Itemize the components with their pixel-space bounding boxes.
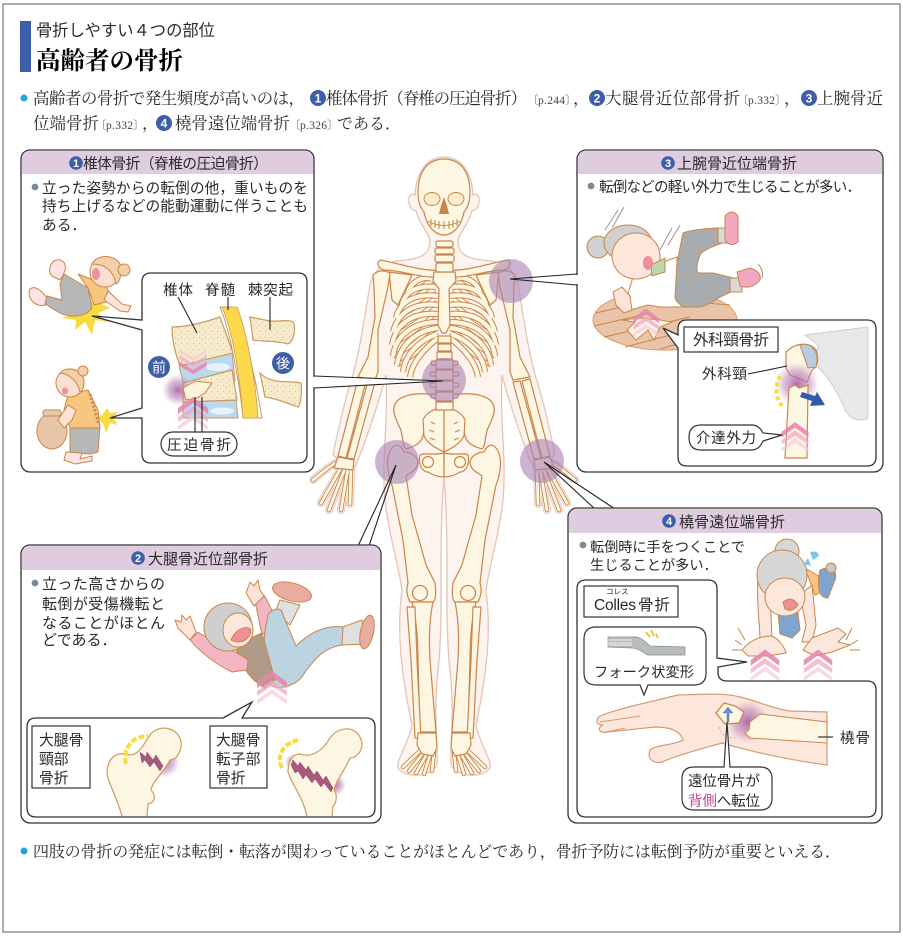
highlight: hip	[375, 440, 419, 484]
force chevrons	[782, 422, 808, 452]
intro lines: p.326	[300, 120, 327, 132]
leader: surgical neck	[748, 366, 787, 374]
label: spinal cord: 脊髄	[205, 282, 236, 299]
badge: front: 前	[152, 360, 166, 376]
panel 4 header	[569, 509, 881, 533]
icon: bent fork	[608, 630, 685, 655]
intro lines: 3	[806, 92, 813, 106]
label: indirect force: 介達外力	[696, 430, 756, 447]
panel 2 description: どである．	[42, 632, 117, 649]
femur: neck fracture	[107, 728, 181, 816]
intro lines: 位端骨折	[33, 113, 99, 133]
panel 1 header	[22, 151, 313, 174]
intro lines: である．	[337, 116, 401, 133]
title block	[20, 21, 215, 75]
label box: femoral neck fracture: 骨折	[39, 770, 69, 787]
fracture fragment	[183, 381, 212, 400]
panel 2 frame	[21, 545, 381, 823]
intro lines: 〔	[95, 119, 107, 132]
label box: trochanteric fracture: 骨折	[216, 770, 246, 787]
subtitle: 骨折しやすい４つの部位	[36, 22, 215, 40]
label box: surgical neck fracture	[684, 327, 778, 352]
label box: Colles fracture: Colles	[594, 597, 636, 614]
intro lines: p.244	[538, 95, 565, 107]
fracture glow	[775, 362, 819, 406]
figure: woman landing on hands	[732, 539, 860, 681]
intro lines: 〕	[327, 119, 338, 132]
title accent bar	[20, 21, 31, 72]
panel 4 frame	[568, 508, 882, 823]
intro lines	[33, 89, 883, 133]
skull	[418, 159, 470, 235]
intro lines: 高齢者の骨折で発生頻度が高いのは，	[33, 89, 305, 108]
panel 4 description	[580, 540, 745, 574]
badge: back: 後	[276, 356, 290, 372]
label: surgical neck: 外科頸	[702, 366, 748, 383]
label box: femoral neck fracture: 大腿骨	[39, 732, 83, 749]
label bubble: distal fragment displaced dorsally	[682, 722, 772, 810]
label: spinous process: 棘突起	[248, 282, 294, 299]
highlight: wrist	[520, 439, 564, 483]
label: indirect force	[689, 425, 782, 450]
panel 4 description: 生じることが多い．	[590, 558, 718, 574]
label: vertebral body: 椎体	[163, 282, 194, 299]
intro lines: 〔	[737, 94, 749, 107]
humeral shaft	[785, 385, 808, 458]
label box: trochanteric fracture	[210, 726, 267, 788]
leader: hip	[358, 465, 396, 546]
inset: surgical neck fracture	[663, 320, 876, 466]
panel 1 description: ある．	[42, 217, 86, 234]
panel 2 header	[22, 546, 380, 570]
label box: surgical neck fracture: 外科頸骨折	[693, 331, 769, 349]
figure: woman falling on shoulder	[587, 207, 762, 350]
label bubble: fork deformity: フォーク状変形	[594, 665, 694, 681]
panel 3 title: 上腕骨近位端骨折	[677, 156, 797, 172]
label: radius: 橈骨	[840, 730, 870, 747]
fracture spark	[776, 376, 782, 406]
panel 3 description: 転倒などの軽い外力で生じることが多い．	[599, 178, 861, 196]
panel 4 description: 転倒時に手をつくことで	[590, 540, 745, 556]
leader: wrist	[544, 462, 615, 509]
figure: woman falling backward	[175, 578, 377, 704]
hand and forearm	[597, 694, 827, 765]
panel 1 description: 立った姿勢からの転倒の他，重いものを	[42, 180, 308, 197]
panel 1 frame	[21, 150, 314, 472]
intro lines: 上腕骨近	[817, 89, 883, 108]
intro lines: 椎体骨折（脊椎の圧迫骨折）	[326, 89, 527, 108]
intro lines: 〕	[133, 119, 144, 132]
label box: femoral neck fracture	[32, 726, 90, 788]
panel 3 frame	[577, 150, 883, 472]
pressure chevrons	[180, 350, 206, 374]
intro lines: 4	[161, 116, 168, 130]
panel 3 header	[578, 151, 882, 174]
label box: Colles fracture: コレス	[606, 587, 628, 596]
label box: femoral neck fracture: 頸部	[39, 751, 69, 768]
vertebrae and discs	[172, 307, 301, 418]
leader lines	[178, 297, 270, 432]
panel 1 description: 持ち上げるなどの能動運動に伴うことも	[42, 198, 308, 215]
label box: Colles fracture	[584, 586, 678, 617]
label: compression fracture	[161, 432, 237, 456]
intro lines: p.332	[106, 120, 133, 132]
intro lines: ，	[573, 89, 590, 108]
scapula	[805, 327, 868, 420]
panel 1: vertebral fracture	[21, 150, 314, 472]
intro lines: ，	[784, 89, 800, 108]
inset: spine close-up	[92, 273, 307, 463]
badge: front	[148, 356, 170, 378]
panel 2 title: 大腿骨近位部骨折	[148, 551, 268, 568]
label box: Colles fracture: 骨折	[638, 596, 670, 614]
inset: femur fracture types	[27, 702, 375, 817]
panel 2: proximal femur fracture	[21, 465, 396, 823]
main title: 高齢者の骨折	[36, 47, 183, 75]
fracture glow	[162, 374, 194, 406]
panel 3: proximal humerus fracture	[577, 150, 883, 472]
intro lines: 〔	[289, 119, 301, 132]
label bubble: distal fragment displaced dorsally: 遠位骨片が	[688, 773, 760, 790]
intro lines: ，	[142, 114, 158, 133]
label: compression fracture: 圧迫骨折	[167, 437, 231, 454]
panel 2 description	[32, 576, 165, 649]
leader: humerus	[510, 274, 577, 285]
label bubble: distal fragment displaced dorsally: 背側へ転位	[688, 793, 760, 810]
panel 4 title: 4	[666, 516, 673, 528]
sternum	[433, 272, 456, 333]
highlight: shoulder	[489, 259, 533, 303]
label box: trochanteric fracture: 転子部	[216, 751, 261, 768]
leader: vertebra	[314, 376, 443, 388]
skeleton figure	[313, 157, 575, 775]
figure: woman lifting pot	[37, 366, 118, 464]
humeral head	[786, 344, 818, 382]
lumbar spine	[430, 336, 459, 410]
bullet	[20, 94, 28, 102]
panel 1 description	[32, 180, 308, 234]
inset: Colles fracture	[577, 580, 876, 817]
label box: trochanteric fracture: 大腿骨	[216, 732, 260, 749]
panel 2 description: 立った高さからの	[42, 576, 165, 593]
badge: back	[272, 352, 294, 374]
intro lines: 〔	[527, 94, 539, 107]
panel 2 description: 転倒が受傷機転と	[42, 596, 165, 613]
figure: woman falling on back	[29, 256, 131, 335]
highlight: lumbar	[422, 358, 466, 402]
cervical spine	[435, 241, 454, 272]
intro lines: 2	[594, 92, 601, 106]
intro lines: 1	[315, 92, 322, 106]
intro paragraph	[20, 89, 883, 133]
left half bones	[313, 260, 444, 774]
intro lines: 大腿骨近位部骨折	[605, 89, 740, 108]
body silhouette	[333, 157, 555, 775]
blue arrow	[800, 392, 825, 406]
leader: radius	[818, 736, 833, 738]
intro lines: p.332	[748, 95, 775, 107]
intro lines: 橈骨遠位端骨折	[175, 113, 290, 133]
panel 1 title: 椎体骨折（脊椎の圧迫骨折）	[83, 156, 268, 172]
right half bones	[444, 260, 575, 774]
intro lines: 〕	[565, 94, 576, 107]
panel 3 title: 3	[665, 158, 671, 170]
closing note: 四肢の骨折の発症には転倒・転落が関わっていることがほとんどであり，骨折予防には転倒予防が重要といえる．	[33, 842, 841, 861]
label bubble: fork deformity	[584, 627, 706, 695]
panel 4 title: 橈骨遠位端骨折	[679, 514, 785, 531]
femur: trochanteric fracture	[280, 729, 362, 816]
panel border gap cover	[314, 275, 577, 387]
panel 1 title: 1	[73, 158, 79, 170]
sacrum detail	[429, 422, 460, 464]
intro lines: 〕	[775, 94, 786, 107]
panel 2 title: 2	[135, 553, 141, 565]
panel 2 description: なることがほとん	[42, 615, 165, 632]
panel 4: distal radius fracture	[544, 462, 882, 823]
